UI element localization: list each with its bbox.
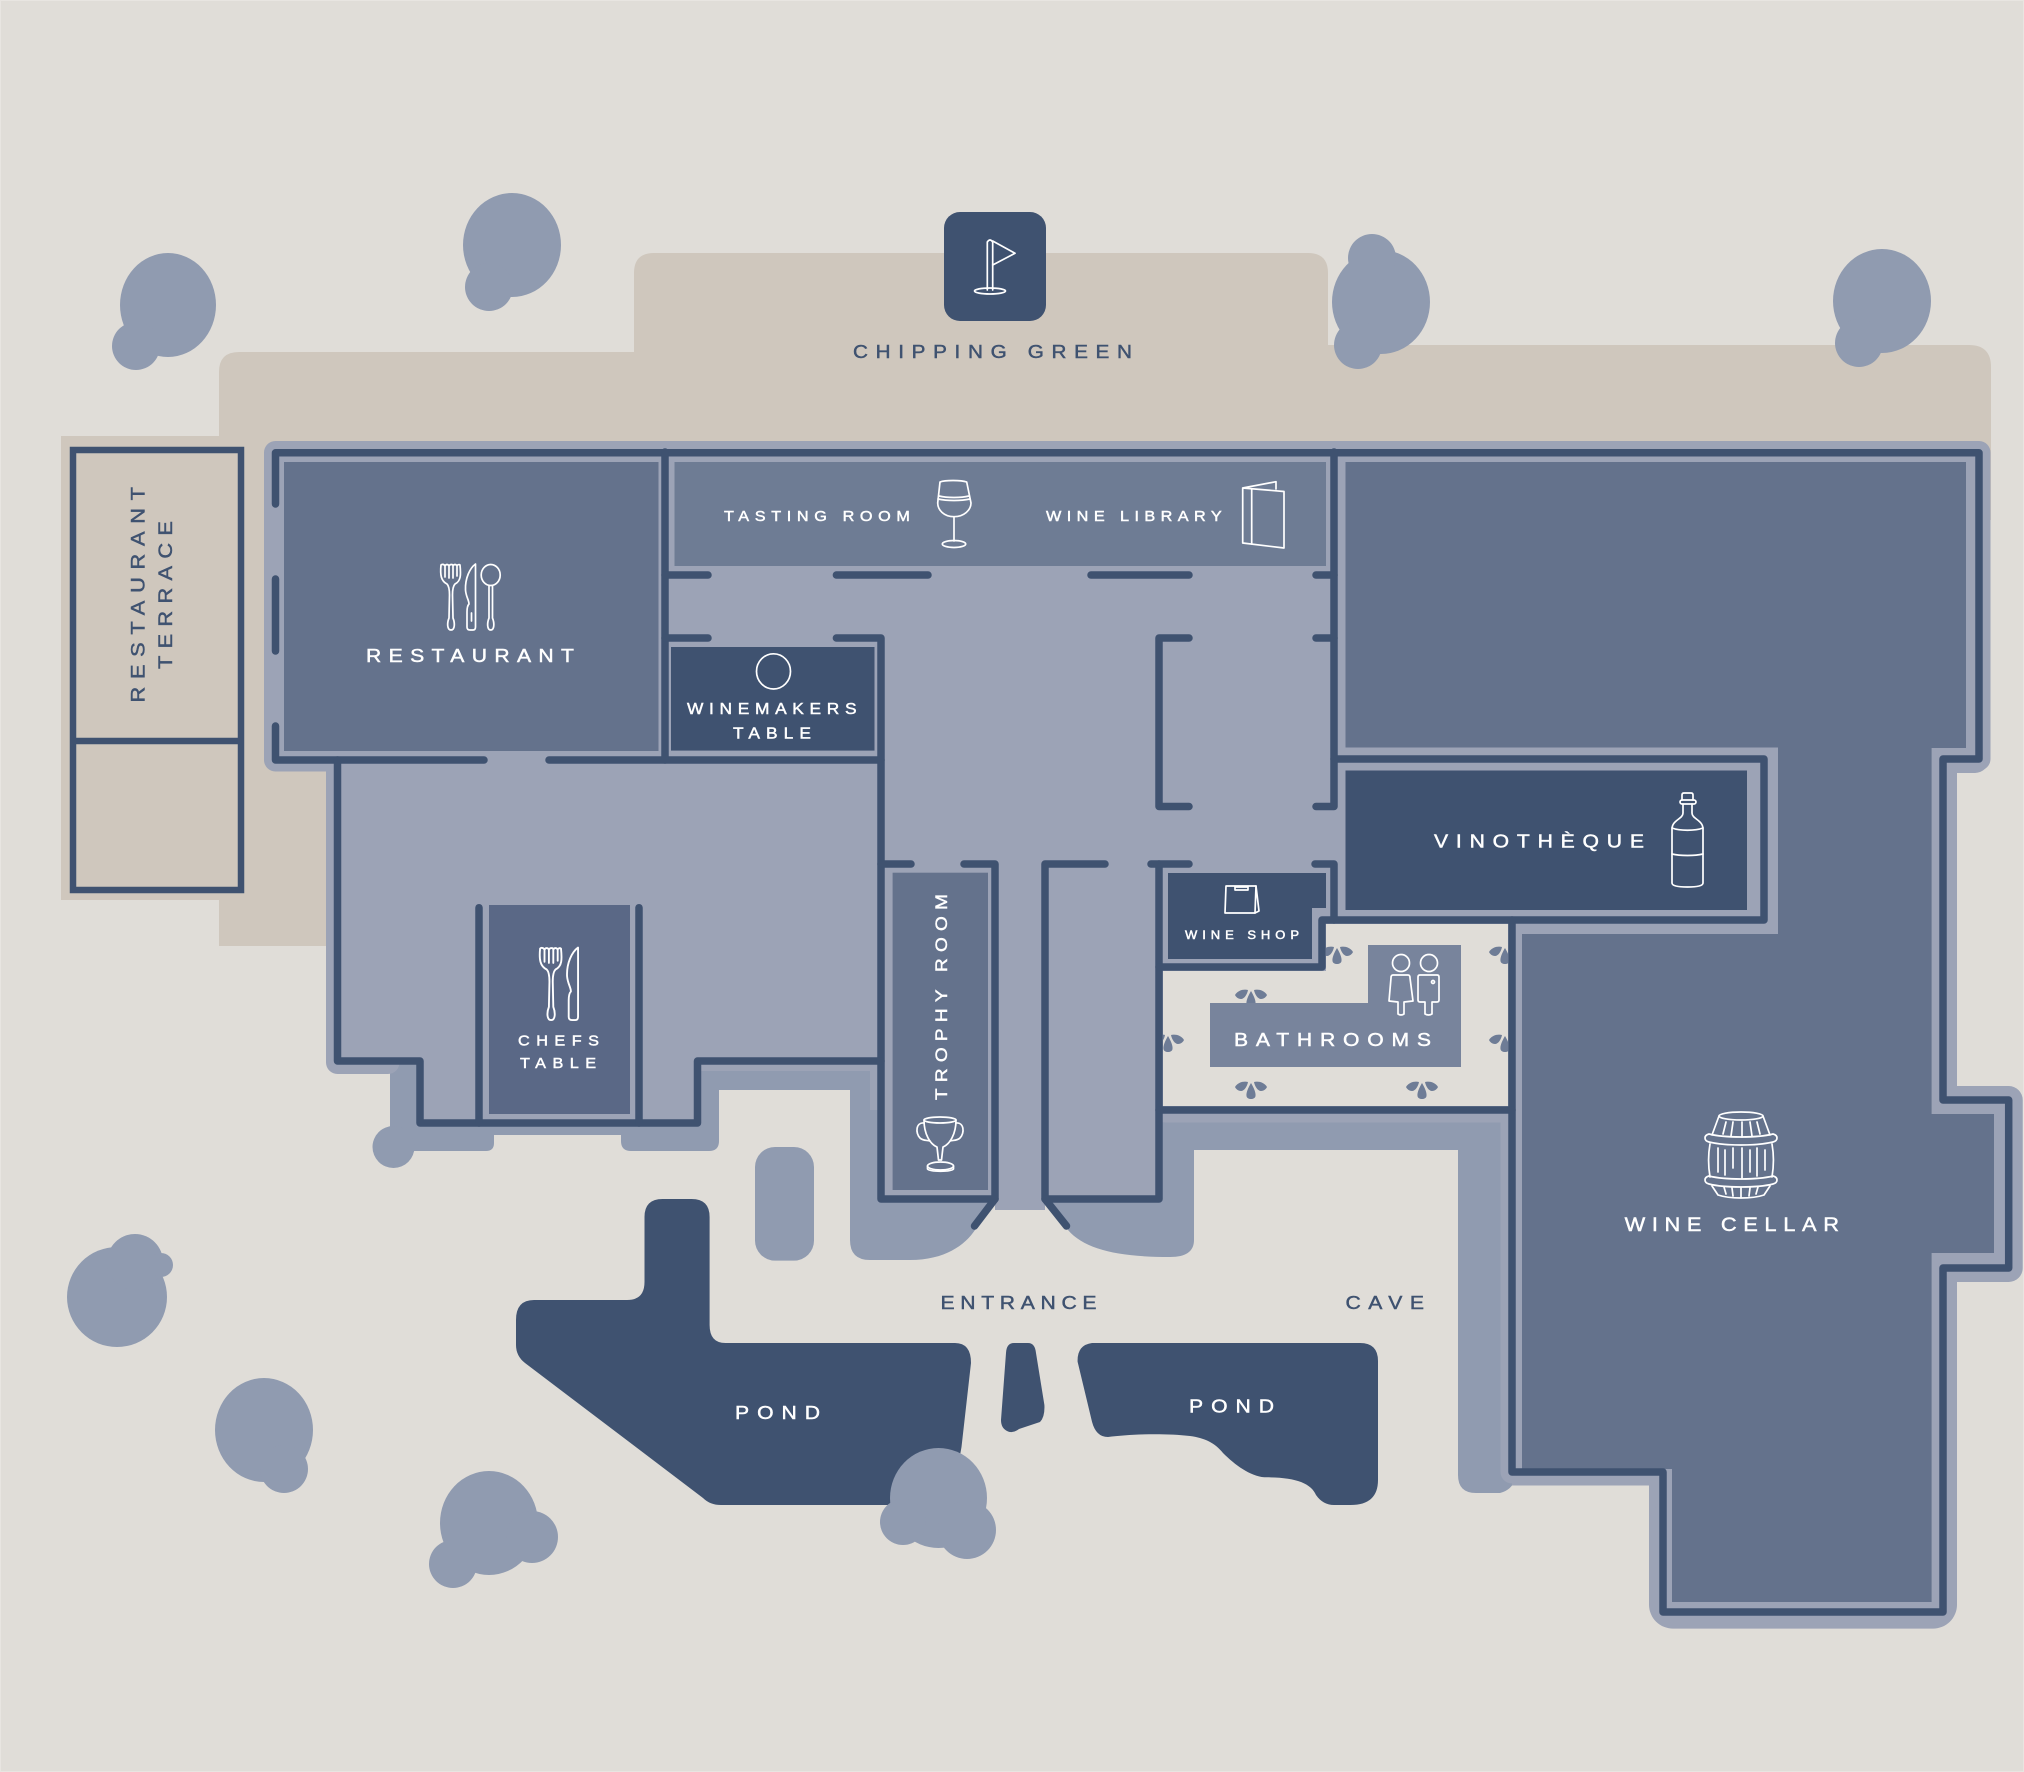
label: restaurant: RESTAURANT bbox=[366, 646, 574, 667]
icon: round table bbox=[756, 654, 790, 689]
hedges around building bbox=[372, 1058, 1516, 1493]
label: entrance: ENTRANCE bbox=[940, 1293, 1097, 1314]
tree lower left small bbox=[215, 1378, 313, 1493]
icon: wine glass bbox=[938, 480, 971, 548]
tree top centre right bbox=[1332, 234, 1430, 369]
label: cave: CAVE bbox=[1346, 1293, 1424, 1314]
tree bottom bbox=[429, 1471, 558, 1588]
label: table: TABLE bbox=[520, 1056, 596, 1072]
tree over pond bbox=[880, 1448, 996, 1559]
tree top right bbox=[1833, 249, 1931, 367]
label: chefs: CHEFS bbox=[518, 1033, 599, 1049]
panel: winemakers table bbox=[671, 647, 874, 751]
icon: shopping bag bbox=[1225, 886, 1259, 913]
panel: trophy room bbox=[893, 873, 988, 1190]
label: table: TABLE bbox=[733, 725, 811, 742]
label: trophy room: TROPHY ROOM bbox=[932, 894, 951, 1100]
tree top left bbox=[112, 253, 216, 370]
tree lower left bbox=[67, 1234, 173, 1347]
label: vinotheque: VINOTHÈQUE bbox=[1434, 831, 1644, 852]
icon: golf flag bbox=[944, 212, 1046, 321]
building floor bbox=[276, 452, 2009, 1612]
icon: barrel bbox=[1705, 1112, 1777, 1198]
panel: wine shop bbox=[1168, 873, 1326, 959]
panel: chefs table bbox=[489, 905, 630, 1114]
right pond bbox=[1078, 1343, 1378, 1505]
icon: cutlery bbox=[441, 564, 500, 630]
chipping green lawn bbox=[219, 253, 1991, 946]
icon: trophy bbox=[917, 1117, 963, 1171]
label: tasting room: TASTING ROOM bbox=[724, 509, 910, 525]
label: chipping green: CHIPPING GREEN bbox=[853, 342, 1132, 363]
label: wine cellar: WINE CELLAR bbox=[1625, 1214, 1839, 1236]
label: wine library: WINE LIBRARY bbox=[1046, 509, 1222, 525]
label: restaurant: RESTAURANT bbox=[128, 487, 149, 702]
bathroom floor ornaments bbox=[1152, 947, 1521, 1099]
building halo bbox=[276, 452, 2009, 1629]
panel: bathrooms sign bbox=[1210, 945, 1461, 1067]
label: winemakers: WINEMAKERS bbox=[687, 701, 857, 718]
tree top centre left bbox=[463, 193, 561, 311]
panel: restaurant bbox=[284, 462, 658, 751]
icon: bathroom figures bbox=[1389, 954, 1439, 1015]
left pond bbox=[516, 1199, 971, 1505]
icon: fork and knife bbox=[540, 948, 578, 1020]
island between ponds bbox=[1001, 1343, 1044, 1432]
panel: restaurant terrace bbox=[73, 450, 241, 890]
panel: vinotheque bbox=[1346, 770, 1747, 910]
bathroom floor bbox=[1163, 924, 1508, 1106]
panel: wine cellar bbox=[1346, 462, 1994, 1602]
label: terrace: TERRACE bbox=[155, 521, 177, 669]
icon: wine list book bbox=[1243, 482, 1284, 548]
label: wine shop: WINE SHOP bbox=[1185, 929, 1299, 942]
label: pond: POND bbox=[735, 1403, 820, 1424]
label: pond: POND bbox=[1189, 1397, 1274, 1417]
hedge pill bbox=[755, 1147, 814, 1261]
walls bbox=[276, 452, 2009, 1612]
icon: bottle bbox=[1672, 793, 1703, 887]
panel: tasting room and wine library bbox=[674, 462, 1326, 566]
label: bathrooms: BATHROOMS bbox=[1234, 1030, 1431, 1051]
terrace ground bbox=[61, 436, 241, 900]
